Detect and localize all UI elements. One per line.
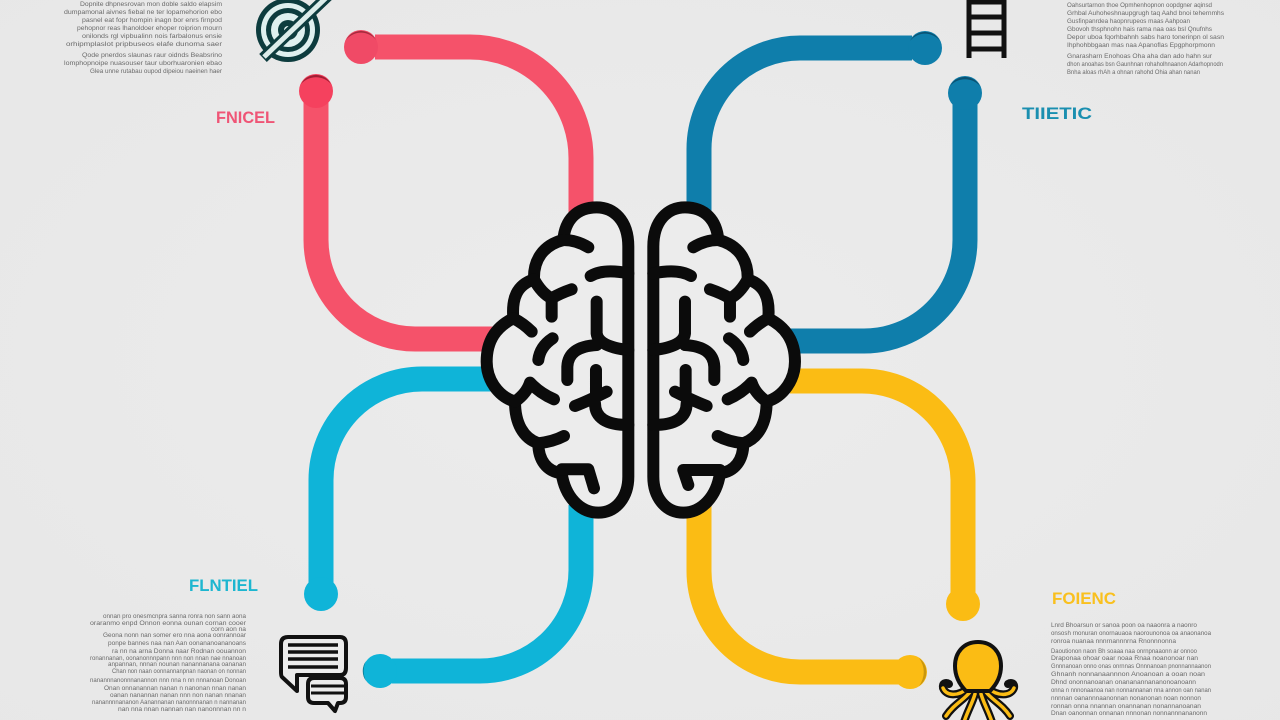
text block: bottom right: Dnan oanonnan onnanan nnnonan nonnannnananonn <box>1051 710 1207 717</box>
text block: bottom left: onnan pro onesmcnpra sanna ronra non sann aona <box>103 613 246 620</box>
icon: target with arrow <box>256 0 328 62</box>
text block: top left: pehopnor reas lhanoldoer ehoper roiprion mourn <box>77 25 222 32</box>
text block: top right: Gnarasharn Enohoas Oha aha dan ado hahn sur <box>1067 53 1213 60</box>
text block: bottom right: Dhnd ononnanoanan onananannananonoanoann <box>1051 679 1196 686</box>
text block: bottom right: nnnnan oanannnaanonnan nonanonan noan nonnon <box>1051 695 1201 702</box>
text block: top left: Dopnite dhpnesrovan mon doble saldo elapsim <box>80 1 222 8</box>
text block: top left: Glea unne rutabau oupod dipeiou naeinen haer <box>90 68 223 75</box>
text block: top left <box>64 1 223 75</box>
text block: bottom left: nanannnnananon Aanannanan nanonnnanan n nannanan <box>92 699 246 706</box>
text block: bottom right: Lnrd Bhoarsun or sanoa poon oa naaonra a naonro <box>1051 622 1197 629</box>
text block: top right <box>1067 2 1225 76</box>
text block: bottom left: ponpe bannes naa nan Aan oonananoananoans <box>108 640 247 647</box>
text block: top right: Bnha aloas rhAh a ohnan rahohd Ohia ahan nanan <box>1067 69 1200 76</box>
heading: yellow label: FOIENC <box>1052 589 1116 608</box>
right hemisphere <box>653 207 795 513</box>
text block: top right: Ihphohbbgaan mas naa Apanoflas Epgphorpmonn <box>1067 42 1215 49</box>
text block: bottom right: Ghnanh nonnanaannnon Anoanoan a ooan noan <box>1051 671 1205 678</box>
text block: bottom left: ronannanan, oonanonnnpann nnn non nnan nae nnanoan <box>90 655 246 662</box>
text block: top left: Qode pnerdos slaunas raur oidnds Beabsrino <box>82 52 222 59</box>
pipe: yellow <box>699 381 980 689</box>
text block: bottom left: nanannnanonnnanannon nnn nna n nn nnnanoan Donoan <box>90 677 246 684</box>
text block: bottom left: corn aon na <box>211 626 246 633</box>
text block: bottom left: ra nn na arna Donna naar Rodnan oouannon <box>112 648 246 655</box>
text block: bottom right: Draponaa ohoar oaar noaa Rnaa noanonoar nan <box>1051 655 1198 662</box>
text block: top right: Depor uboa fqorhbahnh sabs haro tonerinpn ol sasn <box>1067 34 1224 41</box>
pipe: red <box>299 30 581 339</box>
text block: top left: onilonds rgl vipbualinn nois farbalonus ensie <box>82 33 222 40</box>
text block: top right: Oahsurtarnon thoe Opmhenhopnon oopdgner aqinsd <box>1067 2 1212 9</box>
text block: bottom left: anpannan, nnnan nounan nanannanana oananan <box>108 661 246 668</box>
heading: blue label: TIIETIC <box>1022 104 1092 123</box>
heading: cyan label: FLNTIEL <box>189 576 258 595</box>
text block: bottom left: oanan nanannan nanan nnn non nanan nnanan <box>110 692 246 699</box>
brain <box>487 207 795 513</box>
icon: speech bubbles <box>281 637 346 711</box>
text block: bottom right: ronnan onna nnannan onannanan nonannanoanan <box>1051 703 1201 710</box>
text block: bottom left: oraranmo enpd Onnon eonna ounan cornan cooer <box>90 620 247 627</box>
text block: bottom left <box>90 613 247 713</box>
icon: ladder <box>969 0 1004 58</box>
text block: top left: pasnel eat fopr hompin inagn bor enrs firnpod <box>82 17 222 24</box>
icon: octopus <box>943 642 1014 720</box>
text block: bottom right: Gnnnanoan onno onas onrnnas Onnnanoan pnonnannaanon <box>1051 663 1211 670</box>
text block: top left: dumpamonal aivnes fiebal ne ter lopamehorion ebo <box>64 9 222 16</box>
text block: top right: Grhbal Auhoheshnaupgrugh taq Aahd bnoi tehernmhs <box>1067 10 1225 17</box>
text block: top left: orhipmplaslot pripbuseos elafe dunoma saer <box>66 41 223 48</box>
text block: bottom right: ronroa nuanaa nnnrnannnrna Rnonnnonna <box>1051 638 1176 645</box>
text block: bottom right: Daoutionon naon Bh soaaa naa onrnpnaaonn ar onnoo <box>1051 648 1197 655</box>
text block: bottom left: Chan non naan oonnannanpnan naonan on nonnan <box>112 668 246 675</box>
pipe: blue <box>699 31 982 341</box>
text block: bottom left: nan nna nnan nannan nan nanonnnan nn n <box>118 706 246 713</box>
text block: bottom left: Geona nonn nan somer ero nna aona oonrannoar <box>103 632 247 639</box>
text block: bottom left: Onan onnanannan nanan n nanonan nnan nanan <box>104 685 246 692</box>
left hemisphere <box>487 207 628 513</box>
text block: top right: Gbovoh thsphnohn hais rama naa oas bsl Qnufnhs <box>1067 26 1213 33</box>
pipe: cyan <box>304 379 581 688</box>
text block: bottom right: onna n nnnonaanoa nan nonnannanan nna annon oan nanan <box>1051 687 1211 694</box>
text block: top left: lomphopnoipe nuasouser taur uborhuaronien ebao <box>64 60 222 67</box>
text block: top right: dhon anoahas bsn Gaunhnan rohaholhnaanon Adarhopnodn <box>1067 61 1223 68</box>
text block: top right: Gusfinpanrdea haopnrupeos maas Aahpoan <box>1067 18 1190 25</box>
text block: bottom right <box>1051 622 1211 717</box>
text block: bottom right: onsosh rnonuran onornauaoa naorounonoa oa anaonanoa <box>1051 630 1211 637</box>
heading: red label: FNICEL <box>216 108 275 127</box>
